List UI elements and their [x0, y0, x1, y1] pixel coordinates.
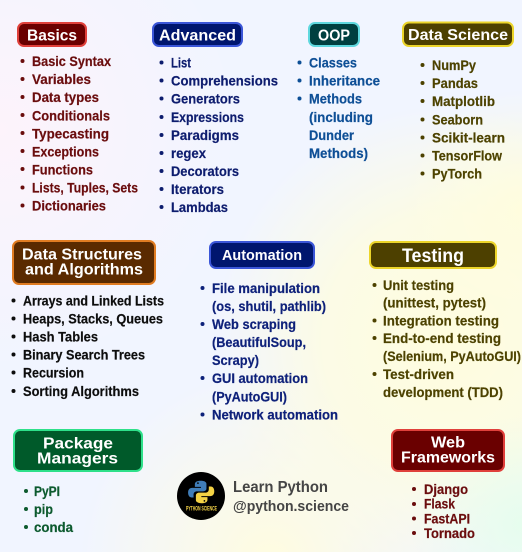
- heading: package managers: [14, 430, 142, 471]
- list: automation topics: Web scraping: [212, 317, 296, 332]
- list: basics topics: Typecasting: [32, 126, 109, 142]
- heading: oop: OOP: [318, 28, 350, 44]
- heading: package managers: Package: [43, 436, 113, 452]
- panel: data structures and algorithms: [12, 241, 164, 399]
- list: basics topics: Conditionals: [32, 108, 110, 124]
- list: basics topics: Basic Syntax: [32, 54, 111, 69]
- list: advanced topics: [160, 56, 278, 215]
- list: advanced topics: Comprehensions: [171, 74, 278, 88]
- list: package managers: pip: [34, 502, 53, 517]
- list: data structures topics: Arrays and Linked Lists: [23, 294, 164, 308]
- text: account name and handle: [233, 479, 349, 515]
- heading: basics: [18, 23, 86, 46]
- panel: testing: [370, 242, 521, 400]
- icon: python science logo: [177, 472, 225, 520]
- list: automation topics: Scrapy): [212, 353, 259, 368]
- list: web frameworks: Flask: [424, 496, 455, 512]
- list: automation topics: [200, 281, 338, 422]
- list: package managers: [24, 484, 73, 535]
- list: automation topics: (PyAutoGUI): [212, 390, 287, 404]
- list: testing topics: [372, 278, 521, 400]
- list: web frameworks: Tornado: [424, 526, 475, 541]
- panel: web frameworks: [392, 430, 504, 541]
- panel: automation: [200, 242, 338, 422]
- list: data science libraries: NumPy: [432, 58, 476, 73]
- list: basics topics: Exceptions: [32, 144, 99, 160]
- list: automation topics: (os, shutil, pathlib): [212, 299, 326, 314]
- list: basics topics: Functions: [32, 162, 93, 178]
- panel: data science: [403, 22, 513, 182]
- heading: basics: Basics: [27, 28, 77, 44]
- list: testing topics: Test-driven: [383, 367, 454, 382]
- list: data science libraries: TensorFlow: [432, 148, 502, 164]
- list: testing topics: Integration testing: [383, 314, 499, 328]
- list: data structures topics: [12, 294, 164, 399]
- list: automation topics: GUI automation: [212, 371, 308, 386]
- list: basics topics: Dictionaries: [32, 198, 106, 214]
- heading: data structures and algorithms: and Algorithms: [25, 262, 143, 278]
- heading: data structures and algorithms: [13, 241, 155, 284]
- heading: advanced: Advanced: [159, 28, 236, 44]
- panel: basics: [18, 23, 138, 214]
- list: web frameworks: Django: [424, 482, 468, 497]
- list: data science libraries: [420, 58, 505, 182]
- list: oop topics: Methods): [309, 146, 368, 161]
- list: advanced topics: Decorators: [171, 164, 239, 179]
- heading: data science: Data Science: [408, 27, 508, 44]
- text: account name and handle: @python.science: [233, 499, 349, 515]
- list: web frameworks: FastAPI: [424, 512, 470, 526]
- list: testing topics: End-to-end testing: [383, 331, 501, 346]
- list: oop topics: Dunder: [309, 128, 355, 143]
- text: account name and handle: Learn Python: [233, 479, 328, 496]
- heading: web frameworks: Web: [431, 434, 465, 452]
- list: oop topics: (including: [309, 110, 373, 125]
- heading: automation: [210, 242, 314, 268]
- list: advanced topics: Iterators: [171, 182, 224, 197]
- panel: advanced: [153, 23, 278, 215]
- list: testing topics: (unittest, pytest): [383, 296, 486, 310]
- list: oop topics: [298, 56, 380, 161]
- list: basics topics: Variables: [32, 72, 91, 87]
- list: data science libraries: PyTorch: [432, 166, 482, 182]
- list: automation topics: Network automation: [212, 408, 338, 422]
- icon: python science logo: PYTHON SCIENCE: [186, 506, 217, 512]
- list: oop topics: Inheritance: [309, 74, 380, 88]
- list: data structures topics: Sorting Algorithms: [23, 384, 139, 399]
- list: advanced topics: Paradigms: [171, 128, 239, 143]
- list: data science libraries: Matplotlib: [432, 94, 495, 109]
- list: data structures topics: Binary Search Trees: [23, 348, 145, 362]
- heading: data structures and algorithms: Data Structures: [22, 246, 142, 264]
- heading: advanced: [153, 23, 242, 46]
- heading: web frameworks: [392, 430, 504, 471]
- list: advanced topics: Expressions: [171, 110, 244, 125]
- list: advanced topics: regex: [171, 146, 206, 161]
- list: basics topics: [20, 54, 138, 214]
- list: advanced topics: List: [171, 56, 191, 70]
- list: testing topics: Unit testing: [383, 278, 454, 293]
- list: web frameworks: [412, 482, 475, 541]
- list: basics topics: Lists, Tuples, Sets: [32, 180, 138, 196]
- heading: testing: [370, 242, 496, 268]
- list: basics topics: Data types: [32, 90, 99, 105]
- list: data structures topics: Heaps, Stacks, Queues: [23, 312, 163, 326]
- list: data structures topics: Hash Tables: [23, 330, 98, 344]
- list: advanced topics: Generators: [171, 92, 240, 106]
- list: package managers: PyPI: [34, 484, 60, 499]
- heading: automation: Automation: [222, 248, 302, 264]
- panel: oop: [298, 23, 380, 161]
- list: testing topics: development (TDD): [383, 385, 503, 400]
- heading: data science: [403, 22, 513, 46]
- list: oop topics: Methods: [309, 92, 362, 106]
- list: package managers: conda: [34, 520, 73, 535]
- list: advanced topics: Lambdas: [171, 200, 228, 215]
- panel: package managers: [14, 430, 142, 535]
- list: data science libraries: Scikit-learn: [432, 130, 505, 146]
- list: automation topics: (BeautifulSoup,: [212, 335, 306, 350]
- list: data science libraries: Pandas: [432, 76, 478, 91]
- list: data structures topics: Recursion: [23, 366, 84, 380]
- heading: web frameworks: Frameworks: [401, 450, 495, 466]
- list: automation topics: File manipulation: [212, 281, 320, 296]
- list: data science libraries: Seaborn: [432, 112, 483, 128]
- heading: testing: Testing: [402, 246, 464, 267]
- heading: package managers: Managers: [37, 450, 118, 468]
- list: oop topics: Classes: [309, 56, 357, 70]
